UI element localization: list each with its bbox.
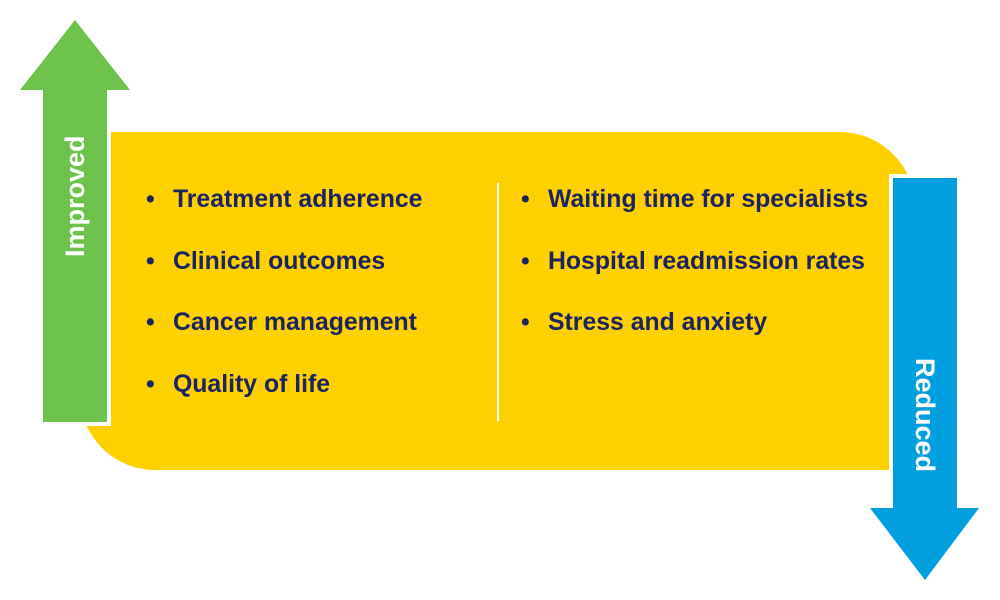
item: Clinical outcomes — [173, 248, 385, 275]
panel: yellow box — [80, 132, 915, 470]
list: reduced items — [522, 186, 868, 336]
icon: green improved arrow — [20, 20, 130, 426]
item: Stress and anxiety — [548, 309, 767, 336]
divider — [497, 183, 499, 421]
list: improved items — [146, 186, 422, 398]
item: Treatment adherence — [173, 186, 422, 213]
label: Improved: Improved — [60, 135, 90, 257]
item: Quality of life — [173, 371, 330, 398]
label: Reduced: Reduced — [910, 358, 940, 472]
item: Waiting time for specialists — [548, 186, 868, 213]
item: Hospital readmission rates — [548, 248, 865, 275]
item: Cancer management — [173, 309, 417, 336]
icon: blue reduced arrow — [870, 174, 979, 580]
